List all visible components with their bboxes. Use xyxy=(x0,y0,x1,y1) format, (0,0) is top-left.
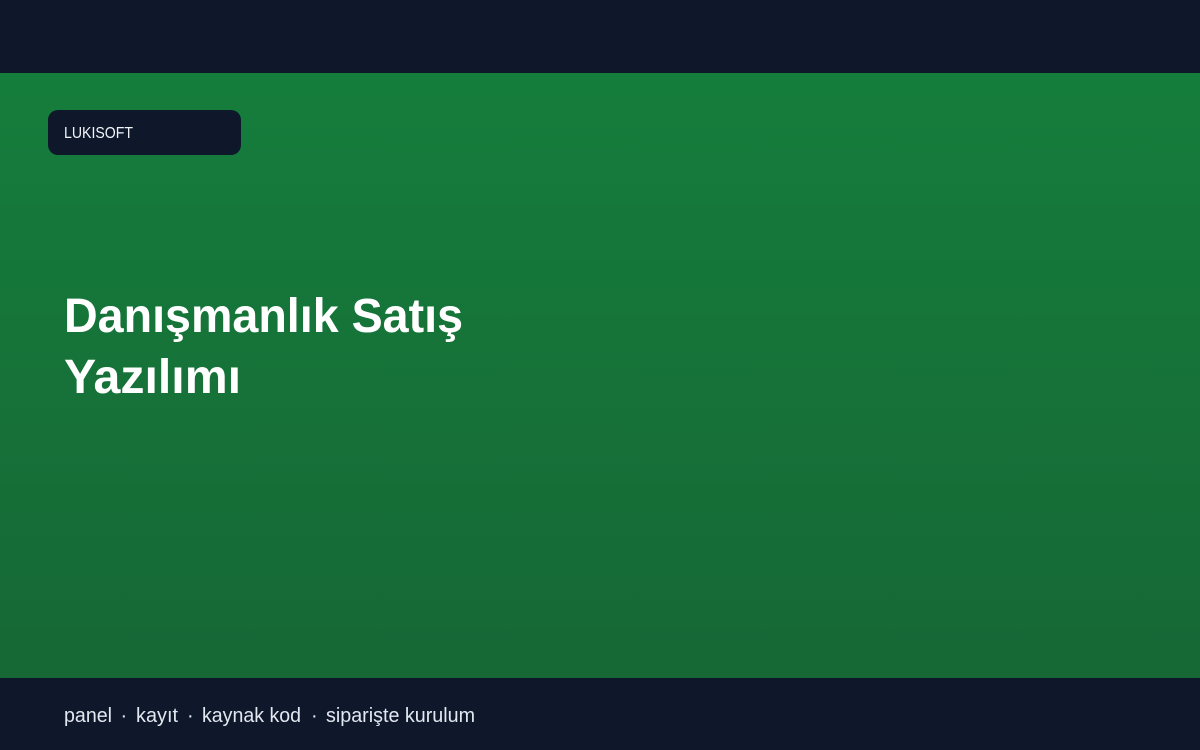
title: Yazılımı xyxy=(64,351,241,404)
top band xyxy=(0,0,1200,73)
title xyxy=(64,290,463,404)
footer feature list: kayıt xyxy=(136,705,178,727)
footer feature list: kaynak kod xyxy=(202,705,301,727)
footer feature list: siparişte kurulum xyxy=(326,705,475,727)
footer feature list: · xyxy=(311,705,318,727)
brand badge: LUKISOFT xyxy=(64,125,133,142)
footer feature list: panel xyxy=(64,705,112,727)
footer band xyxy=(0,678,1200,750)
brand badge xyxy=(48,110,241,155)
footer feature list xyxy=(64,705,475,727)
footer feature list: · xyxy=(120,705,127,727)
footer feature list: · xyxy=(187,705,194,727)
title: Danışmanlık Satış xyxy=(64,290,463,343)
